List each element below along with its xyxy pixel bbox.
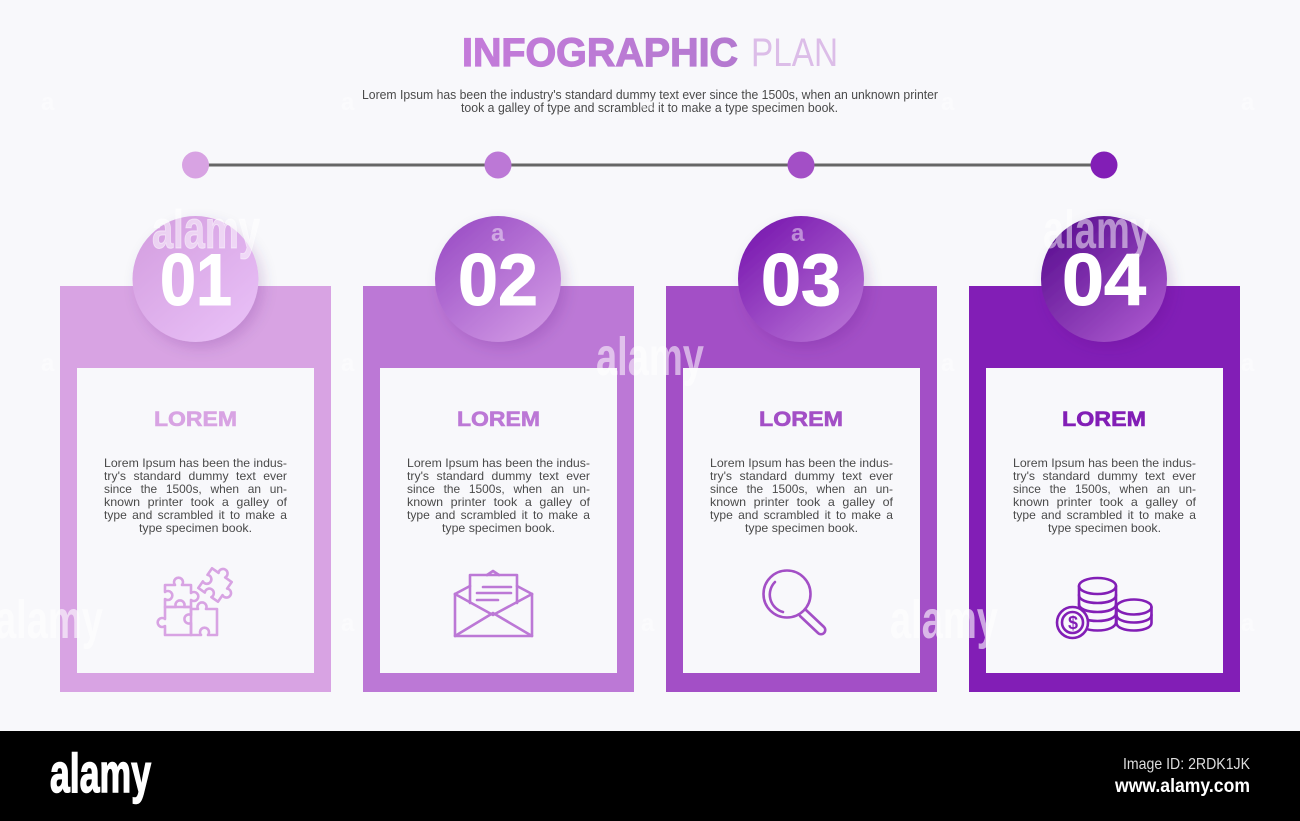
- icon: puzzle: [158, 563, 241, 635]
- body text 01: try's standard dummy text ever: [104, 469, 287, 483]
- body text 02: type specimen book.: [442, 521, 555, 535]
- body text 02: since the 1500s, when an un-: [407, 482, 590, 496]
- title: INFOGRAPHIC: [462, 31, 738, 75]
- body text 03: known printer took a galley of: [710, 495, 894, 509]
- watermarks: a: [941, 350, 955, 377]
- panel: step 04: [969, 216, 1240, 692]
- icon: coins: $: [1068, 613, 1078, 633]
- body text 01: type and scrambled it to make a: [104, 508, 287, 522]
- body text 01: Lorem Ipsum has been the indus-: [104, 456, 287, 470]
- heading 01: LOREM: [154, 408, 237, 431]
- body text 04: type specimen book.: [1048, 521, 1161, 535]
- watermarks: alamy: [152, 200, 260, 260]
- number badge 02: 02: [458, 240, 538, 321]
- body text 02: type and scrambled it to make a: [407, 508, 590, 522]
- watermarks: a: [1241, 89, 1255, 116]
- watermarks: a: [41, 89, 55, 116]
- body text 01: since the 1500s, when an un-: [104, 482, 287, 496]
- subtitle text: [362, 88, 938, 115]
- body text 03: Lorem Ipsum has been the indus-: [710, 456, 893, 470]
- panel: step 01: [60, 216, 331, 692]
- watermarks: alamy: [1043, 200, 1151, 260]
- number badge 04: 04: [1062, 240, 1146, 321]
- timeline: [182, 152, 1118, 178]
- heading 03: LOREM: [759, 408, 843, 431]
- body text 04: Lorem Ipsum has been the indus-: [1013, 456, 1196, 470]
- heading 04: LOREM: [1062, 408, 1146, 431]
- watermarks: a: [641, 610, 655, 637]
- number badge 01: 01: [160, 240, 232, 321]
- body text 03: since the 1500s, when an un-: [710, 482, 893, 496]
- body text 03: type and scrambled it to make a: [710, 508, 893, 522]
- footer bar: [0, 731, 1300, 821]
- body text 02: Lorem Ipsum has been the indus-: [407, 456, 590, 470]
- watermarks: a: [341, 610, 355, 637]
- watermarks: alamy: [596, 327, 704, 387]
- body text 02: try's standard dummy text ever: [407, 469, 590, 483]
- body text 01: [104, 456, 288, 535]
- panel: step 02: [363, 216, 634, 692]
- title: PLAN: [751, 31, 838, 75]
- footer url: www.alamy.com: [1114, 776, 1250, 797]
- body text 04: since the 1500s, when an un-: [1013, 482, 1196, 496]
- subtitle text: Lorem Ipsum has been the industry's standard dummy text ever since the 1500s, when an unknown printer: [362, 88, 938, 102]
- body text 02: known printer took a galley of: [407, 495, 591, 509]
- body text 04: [1013, 456, 1197, 535]
- body text 03: type specimen book.: [745, 521, 858, 535]
- number badge 03: 03: [761, 240, 841, 321]
- watermarks: a: [341, 89, 355, 116]
- footer logo: alamy: [50, 742, 151, 804]
- body text 04: known printer took a galley of: [1013, 495, 1197, 509]
- icon: coins: [1057, 578, 1152, 638]
- subtitle text: took a galley of type and scrambled it to make a type specimen book.: [461, 101, 838, 115]
- watermarks: a: [791, 220, 805, 247]
- body text 03: try's standard dummy text ever: [710, 469, 893, 483]
- icon: envelope: [455, 571, 532, 636]
- watermarks: a: [1241, 610, 1255, 637]
- icon: magnifier: [764, 570, 825, 634]
- number badge 02: [435, 216, 561, 342]
- image id: Image ID: 2RDK1JK: [1123, 756, 1250, 773]
- watermarks: a: [41, 350, 55, 377]
- body text 04: type and scrambled it to make a: [1013, 508, 1196, 522]
- panel: step 03: [666, 216, 937, 692]
- heading 02: LOREM: [457, 408, 540, 431]
- body text 03: [710, 456, 894, 535]
- body text 04: try's standard dummy text ever: [1013, 469, 1196, 483]
- watermarks: a: [641, 89, 655, 116]
- watermarks: a: [491, 220, 505, 247]
- body text 01: known printer took a galley of: [104, 495, 288, 509]
- watermarks: a: [941, 89, 955, 116]
- body text 02: [407, 456, 591, 535]
- watermarks: a: [341, 350, 355, 377]
- watermarks: [0, 89, 1255, 650]
- number badge 03: [738, 216, 864, 342]
- body text 01: type specimen book.: [139, 521, 252, 535]
- watermarks: a: [1241, 350, 1255, 377]
- number badge 04: [1041, 216, 1167, 342]
- number badge 01: [132, 216, 258, 342]
- watermarks: alamy: [890, 590, 998, 650]
